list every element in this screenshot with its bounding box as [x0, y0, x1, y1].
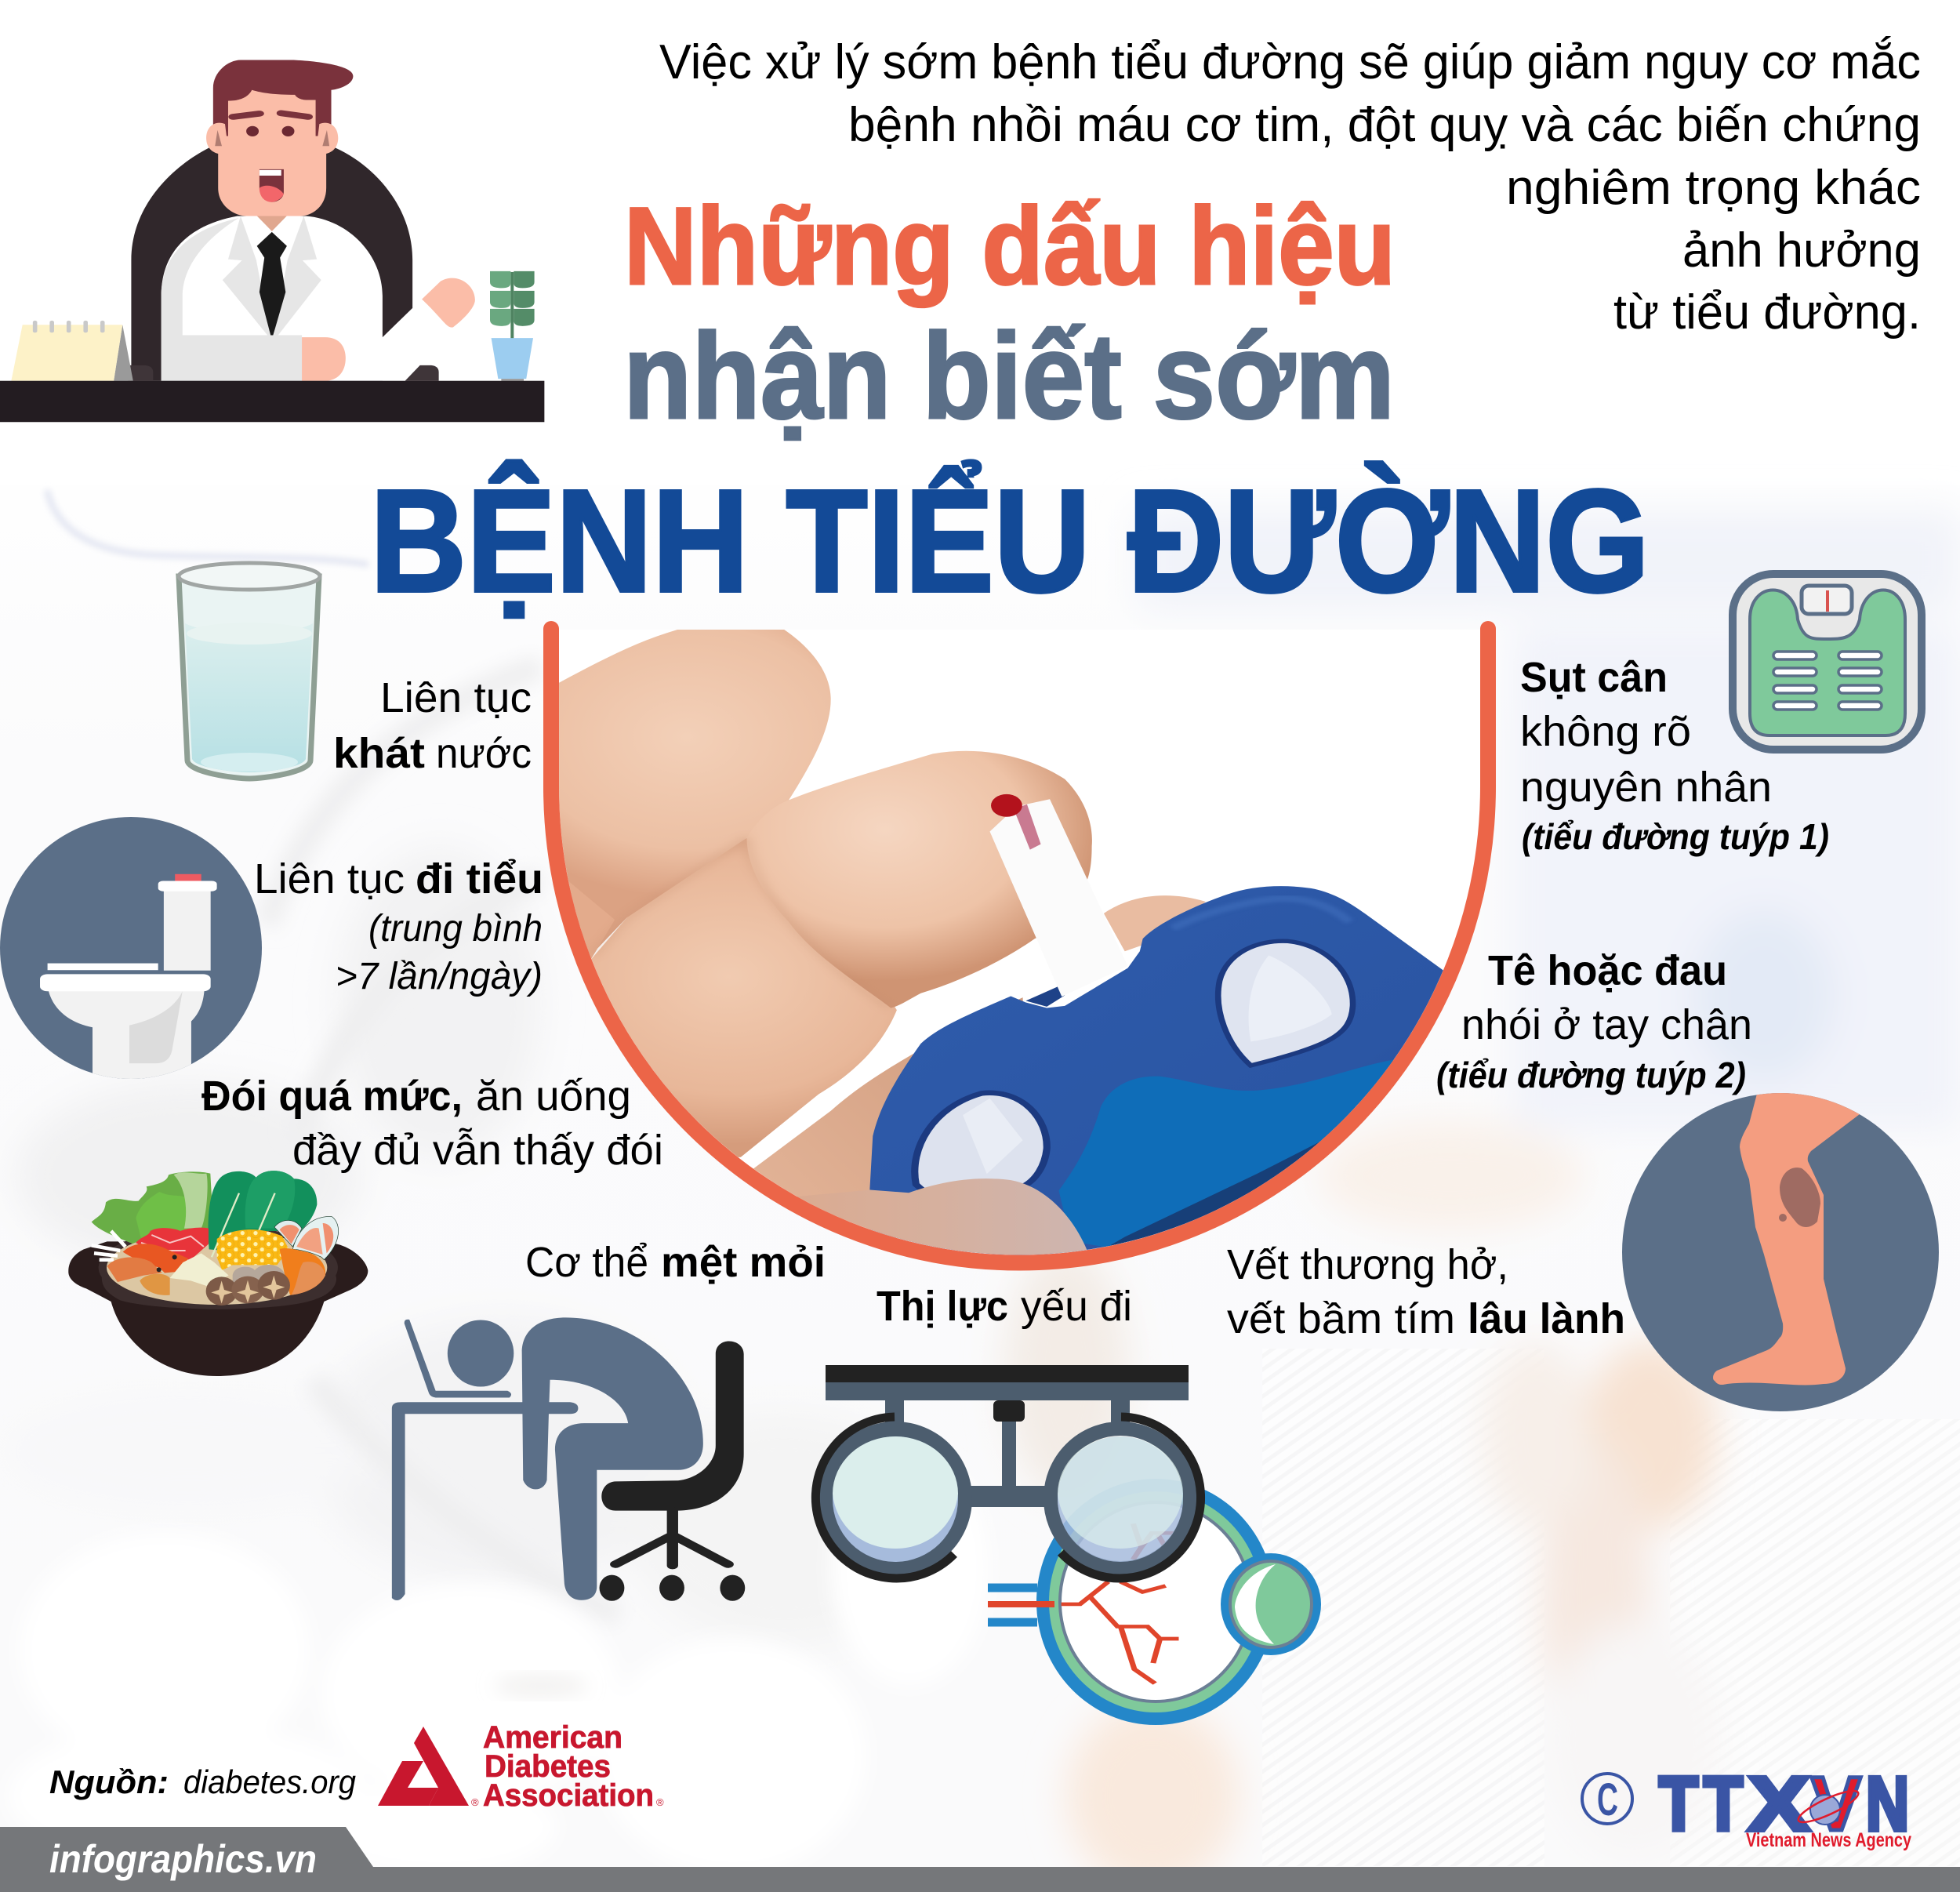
marbled meat: [136, 1228, 209, 1260]
intro paragraph: từ tiểu đường.: [1613, 285, 1921, 340]
title: [370, 184, 1650, 623]
logo: American Diabetes Association: Diabetes: [485, 1749, 611, 1784]
face: [218, 90, 326, 216]
title line 3: BỆNH TIỂU ĐƯỜNG: [370, 460, 1650, 623]
logo: TTXVN: V: [1811, 1761, 1861, 1847]
icon: weighing scale: [1733, 574, 1922, 750]
text: frequent urination: (trung bình: [368, 908, 543, 950]
logo: TTXVN: Vietnam News Agency: [1746, 1829, 1911, 1851]
text: frequent urination: đi tiểu: [416, 855, 543, 902]
logo: American Diabetes Association: American: [483, 1720, 622, 1755]
text: frequent urination: [254, 855, 543, 997]
icon: leg with bruise: [1622, 1082, 1939, 1411]
icon: toilet: [0, 817, 262, 1099]
text: excessive hunger: Đói quá mức,: [201, 1073, 463, 1120]
tofu: [170, 1253, 229, 1286]
eyebrows: [233, 113, 308, 117]
finger: phalanx: [591, 837, 897, 1157]
text: thirst: [333, 674, 532, 777]
text: numbness: Tê hoặc đau: [1488, 947, 1727, 994]
left lens: [815, 1417, 972, 1578]
desk and laptop: [392, 1320, 578, 1600]
footer bar: [0, 1827, 1960, 1892]
hands: [302, 278, 475, 381]
lapels: [223, 216, 321, 336]
thumb foreground: [747, 1178, 1090, 1309]
soup: [94, 1226, 343, 1309]
text: weight loss: Sụt cân: [1520, 654, 1668, 701]
corn: [217, 1229, 289, 1270]
teeth: [260, 170, 281, 176]
calendar: [11, 322, 133, 381]
text: slow healing wounds: vết bầm tím: [1227, 1295, 1455, 1342]
armrests: [128, 365, 439, 381]
footer website text: infographics.vn: [49, 1837, 317, 1881]
logo: American Diabetes Association: ®: [656, 1796, 664, 1808]
text: vision: yếu đi: [1021, 1283, 1132, 1330]
text: excessive hunger: ăn uống: [476, 1073, 631, 1120]
doctor illustration: [0, 60, 544, 422]
plant: [490, 271, 535, 381]
tie: [257, 232, 287, 336]
finger crease shadow: [593, 837, 846, 977]
ear detail: [215, 130, 329, 146]
meter highlight: [1173, 899, 1350, 928]
foot pad lines: [1773, 652, 1882, 710]
dial: [1802, 586, 1852, 614]
pot rim: [99, 1226, 338, 1309]
strip slot: [1025, 985, 1065, 1007]
blood vessels: [1062, 1523, 1179, 1683]
orange slice: [140, 1274, 170, 1295]
text: thirst: Liên tục: [380, 674, 532, 721]
test strip: [989, 799, 1128, 997]
text: thirst: khát: [333, 730, 425, 777]
pot: [68, 1241, 368, 1376]
mouth: [260, 169, 284, 202]
text: vision: [877, 1283, 1132, 1330]
photo: finger and blood glucose meter: [559, 630, 1443, 1255]
desk: [0, 381, 544, 422]
test strip reagent: [1014, 804, 1041, 850]
hair back: [213, 60, 353, 144]
text: slow healing wounds: [1227, 1241, 1625, 1342]
top bar: [826, 1365, 1189, 1382]
text: fatigue: mệt mỏi: [661, 1239, 826, 1286]
bok choy: [208, 1171, 317, 1252]
text: excessive hunger: [201, 1073, 663, 1174]
text: numbness: [1436, 947, 1752, 1095]
source credit: diabetes.org: [183, 1763, 356, 1800]
optic nerve: [988, 1588, 1037, 1622]
eyes: [246, 126, 294, 136]
logo: American Diabetes Association: ®: [471, 1796, 479, 1808]
neck: [256, 215, 288, 231]
white coat: [162, 216, 405, 381]
title line 2: nhận biết sớm: [623, 308, 1395, 444]
clams: [274, 1217, 339, 1260]
ears: [206, 123, 338, 154]
cornea: [1221, 1553, 1321, 1655]
intro paragraph: bệnh nhồi máu cơ tim, đột quỵ và các biến chứng: [848, 98, 1921, 152]
text: frequent urination: >7 lần/ngày): [336, 956, 543, 997]
source credit: Nguồn:: [49, 1763, 169, 1800]
logo: TTXVN: T: [1659, 1761, 1698, 1847]
lettuce pale leaf: [174, 1172, 208, 1229]
chair back: [131, 146, 412, 381]
logo: American Diabetes Association: [378, 1720, 664, 1813]
text: excessive hunger: đầy đủ vẫn thấy đói: [292, 1127, 663, 1174]
orange U-shaped frame: [551, 629, 1488, 1263]
supports: [885, 1400, 1130, 1507]
icon: tired person at desk: [392, 1317, 745, 1601]
icon: eye anatomy: [988, 1479, 1321, 1725]
finger: tip: [747, 751, 1092, 1008]
icon: glass of water: [179, 563, 320, 779]
bruise: [1780, 1168, 1820, 1227]
intro paragraph: nghiêm trọng khác: [1506, 161, 1921, 215]
intro paragraph: ảnh hưởng: [1682, 223, 1921, 278]
logo: American Diabetes Association: Association: [483, 1778, 654, 1813]
left sleeve: [162, 218, 302, 381]
mushrooms: [206, 1271, 290, 1306]
tongue: [260, 186, 284, 202]
text: fatigue: [525, 1239, 826, 1286]
logo: TTXVN: T: [1704, 1761, 1743, 1847]
logo: TTXVN: X: [1748, 1761, 1809, 1847]
meter light panel: [1059, 1056, 1485, 1250]
head: [448, 1320, 514, 1387]
mushrooms back: [233, 1265, 285, 1284]
meter button right: [1218, 941, 1353, 1066]
text: slow healing wounds: lâu lành: [1468, 1295, 1625, 1342]
lettuce: [92, 1171, 214, 1244]
right lens: [1051, 1417, 1201, 1578]
intro paragraph: Việc xử lý sớm bệnh tiểu đường sẽ giúp giảm nguy cơ mắc: [659, 35, 1921, 89]
logo: TTXVN: [1582, 1761, 1911, 1851]
body: [522, 1317, 703, 1600]
meter lower dark edge: [1089, 1140, 1377, 1275]
pot front lip: [102, 1276, 336, 1309]
icon: hot pot: [68, 1171, 368, 1376]
intro paragraph: [659, 35, 1921, 340]
icon: phoropter glasses: [815, 1365, 1201, 1578]
text: frequent urination: Liên tục: [254, 855, 405, 902]
logo: TTXVN: N: [1866, 1761, 1909, 1847]
carrot and orange vegetables: [280, 1248, 325, 1295]
meter body: [869, 886, 1443, 1255]
lower finger: [753, 997, 1023, 1238]
text: slow healing wounds: Vết thương hở,: [1227, 1241, 1508, 1288]
text: numbness: nhói ở tay chân: [1461, 1001, 1752, 1048]
chair: [601, 1341, 744, 1511]
text: weight loss: (tiểu đường tuýp 1): [1522, 816, 1829, 857]
text: numbness: (tiểu đường tuýp 2): [1436, 1055, 1746, 1095]
text: thirst: nước: [436, 730, 532, 777]
text: vision: Thị lực: [877, 1283, 1008, 1330]
shrimp: [123, 1244, 188, 1273]
logo: TTXVN: C: [1597, 1774, 1618, 1825]
text: weight loss: nguyên nhân: [1520, 764, 1772, 811]
finger: upper: [537, 629, 831, 956]
thumb behind meter: [1104, 895, 1206, 951]
finger: lower-left knuckle: [568, 881, 615, 959]
text: weight loss: không rõ: [1520, 708, 1691, 755]
title line 1: Những dấu hiệu: [624, 184, 1396, 307]
blood drop: [991, 794, 1022, 817]
text: fatigue: Cơ thể: [525, 1239, 648, 1286]
meter button left: [915, 1093, 1047, 1199]
shrimp tail: [92, 1231, 125, 1260]
text: weight loss: [1520, 654, 1829, 857]
source credit: [49, 1763, 356, 1800]
